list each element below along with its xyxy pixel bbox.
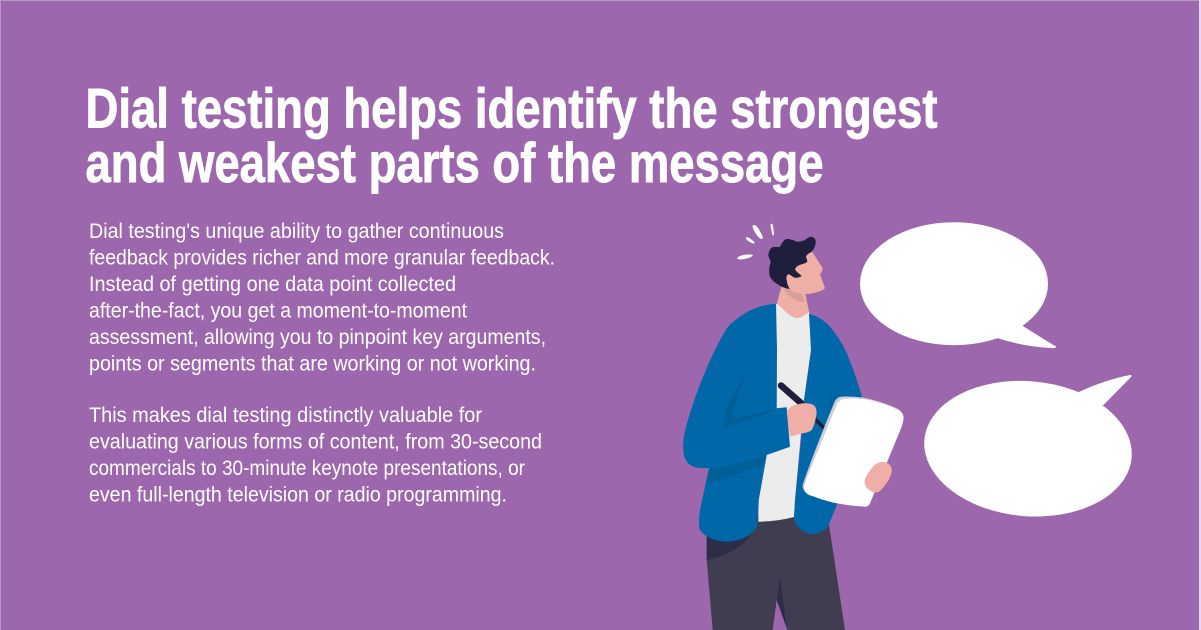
icon: upper speech bubble: [860, 222, 1056, 348]
icon: lower speech bubble: [919, 372, 1137, 525]
trousers: [707, 510, 845, 630]
text block: continuous feedback paragraph: [89, 220, 555, 376]
illustration: man with clipboard: [683, 224, 904, 630]
head: [785, 248, 825, 294]
neck: [777, 286, 809, 320]
pen: [781, 386, 823, 427]
text block: continuous feedback paragraph: after-the-fact, you get a moment-to-moment: [89, 300, 467, 322]
hair: [768, 237, 816, 289]
hand holding pen: [787, 403, 817, 437]
icon: surprise marks: [737, 224, 774, 259]
blue jacket: [683, 304, 862, 542]
clipboard: [802, 397, 904, 507]
thumb: [865, 462, 892, 492]
title: and weakest parts of the message: [86, 131, 824, 194]
text block: content evaluation paragraph: This makes dial testing distinctly valuable for: [89, 404, 482, 427]
text block: continuous feedback paragraph: feedback provides richer and more granular feedback.: [89, 246, 555, 270]
text block: content evaluation paragraph: [89, 404, 542, 506]
title: [86, 76, 938, 194]
title: Dial testing helps identify the strongest: [86, 76, 938, 140]
text block: continuous feedback paragraph: Instead of getting one data point collected: [89, 273, 456, 296]
text block: content evaluation paragraph: even full-length television or radio programming.: [89, 484, 507, 506]
text block: content evaluation paragraph: commercials to 30-minute keynote presentations, or: [89, 457, 525, 480]
white t-shirt: [758, 304, 811, 522]
text block: continuous feedback paragraph: points or segments that are working or not working.: [89, 352, 536, 376]
text block: continuous feedback paragraph: assessment, allowing you to pinpoint key arguments,: [89, 326, 546, 349]
text block: continuous feedback paragraph: Dial testing's unique ability to gather continuous: [89, 220, 504, 243]
text block: content evaluation paragraph: evaluating various forms of content, from 30-second: [89, 430, 542, 454]
